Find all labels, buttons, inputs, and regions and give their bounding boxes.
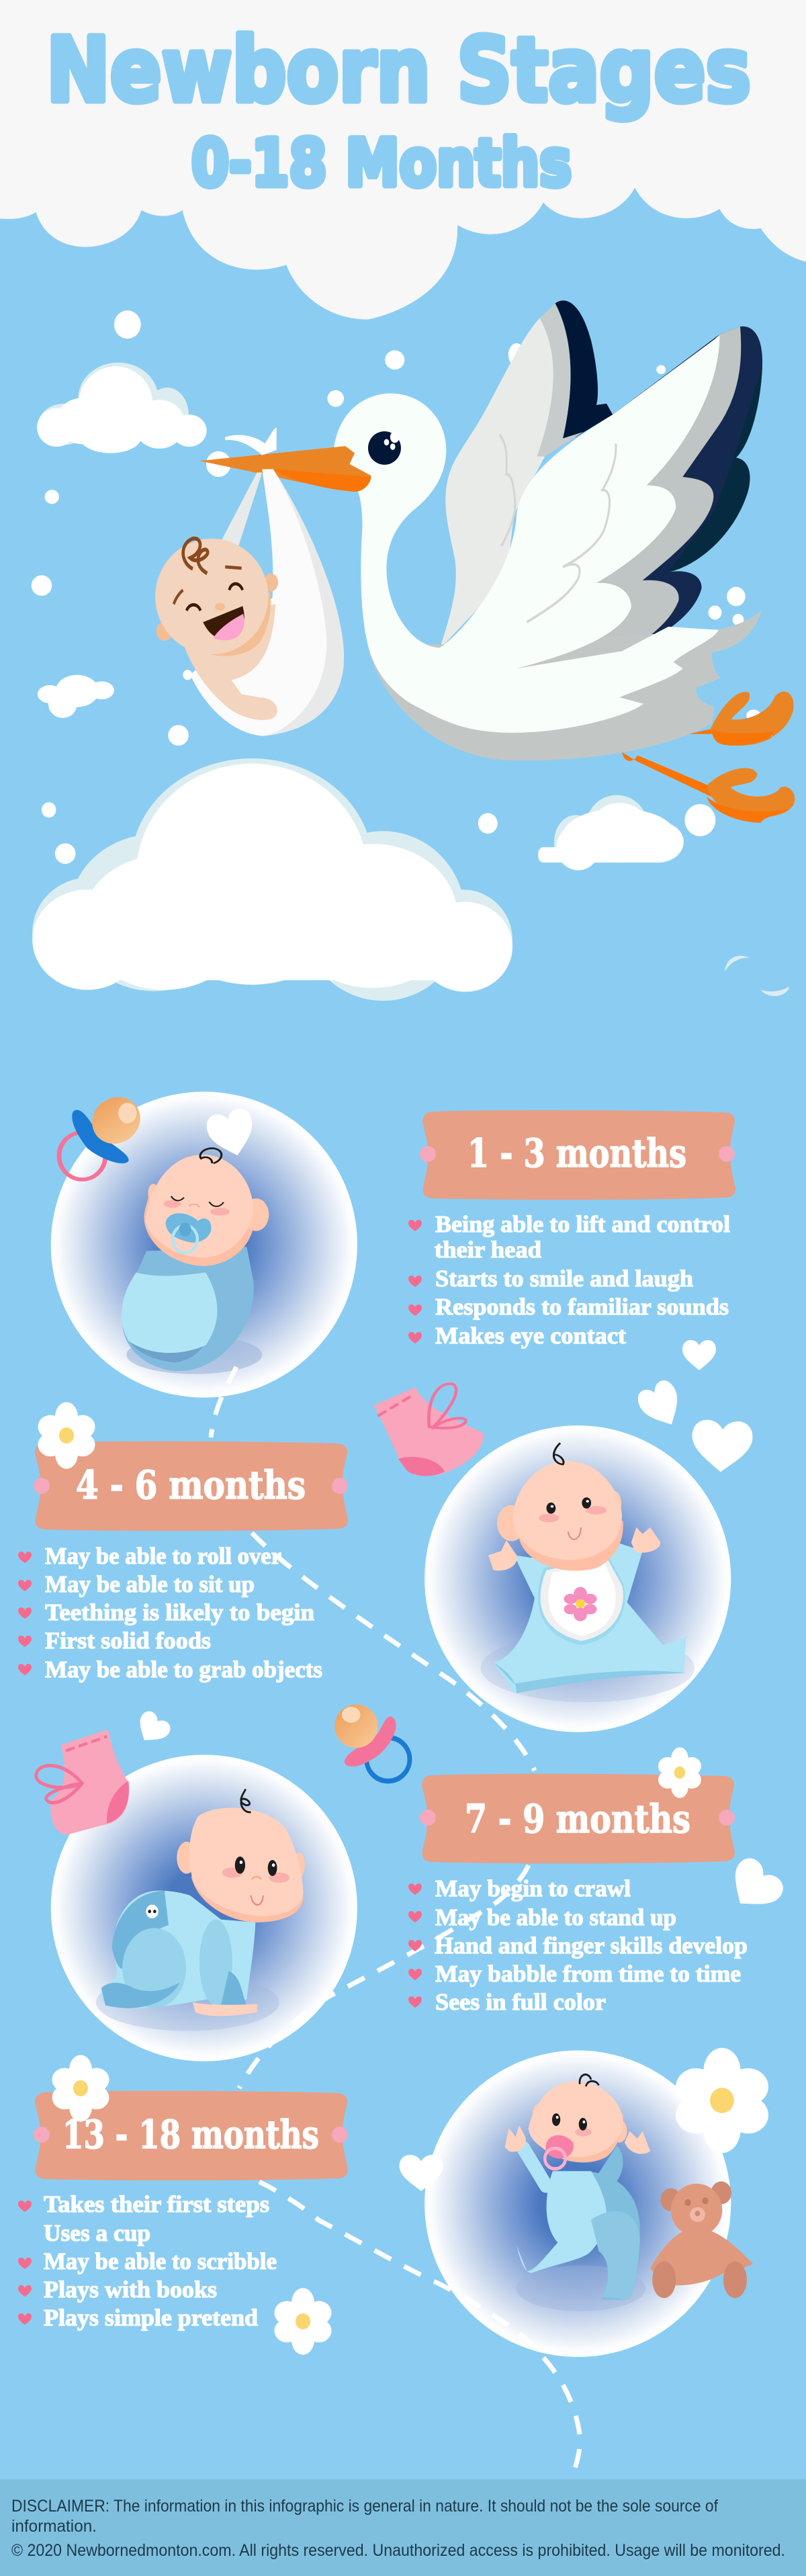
baby: sitting with bib <box>481 1443 695 1702</box>
ribbon <box>420 1110 735 1200</box>
far wing <box>439 300 613 649</box>
ribbon <box>420 1774 735 1863</box>
milestones list: Takes their first steps <box>44 2191 269 2217</box>
pacifier: pink and blue <box>334 1704 410 1781</box>
stage: 13 - 18 months <box>18 2091 348 2331</box>
baby: walking with pacifier <box>505 2074 650 2311</box>
milestones list: Plays with books <box>44 2276 217 2303</box>
wing feather lines <box>527 443 616 622</box>
milestones list: May be able to stand up <box>435 1904 676 1930</box>
cloud: upper left <box>37 363 207 453</box>
bubble: 4-6 months <box>424 1425 731 1732</box>
milestones list: Sees in full color <box>435 1989 606 2015</box>
milestones list: May be able to grab objects <box>45 1656 322 1683</box>
stage: 7 - 9 months <box>408 1774 748 2015</box>
disclaimer band <box>0 2479 806 2576</box>
title <box>46 19 751 201</box>
bundle cloth <box>190 468 344 736</box>
milestones list: May begin to crawl <box>435 1875 631 1902</box>
milestones list: Being able to lift and control <box>435 1211 730 1237</box>
milestones list: Uses a cup <box>44 2220 150 2246</box>
body underside <box>367 611 762 760</box>
stork legs and feet <box>622 693 793 823</box>
milestones list: May babble from time to time <box>435 1961 741 1987</box>
body and neck <box>334 336 719 733</box>
swooshes <box>725 956 790 996</box>
hero illustration <box>32 300 793 1001</box>
disclaimer band: DISCLAIMER: The information in this infographic is general in nature. It should not be the sole source of <box>11 2497 718 2516</box>
ribbon <box>34 2091 348 2180</box>
dashed journey path <box>211 1367 580 2477</box>
baby: crawling <box>96 1789 305 2031</box>
milestones list: Starts to smile and laugh <box>435 1265 693 1292</box>
milestones list: May be able to roll over <box>45 1543 281 1569</box>
subtitle: 0-18 Months <box>191 126 572 201</box>
ribbon <box>34 1441 348 1531</box>
heading: 4 - 6 months <box>76 1462 306 1508</box>
baby in bundle <box>155 427 344 736</box>
floating dots <box>32 310 761 864</box>
bubbles row 1 and 2 <box>51 1092 731 1732</box>
baby: swaddled and sleeping <box>122 1148 269 1374</box>
sock: pink with bow <box>373 1384 484 1476</box>
hearts <box>131 1106 788 2191</box>
milestones list: their head <box>435 1237 542 1263</box>
milestones list: May be able to sit up <box>45 1571 255 1597</box>
milestones list: Responds to familiar sounds <box>435 1294 729 1320</box>
stage: 1 - 3 months <box>408 1110 735 1349</box>
stage: 4 - 6 months <box>18 1441 348 1683</box>
disclaimer band: information. <box>11 2517 97 2536</box>
milestones list <box>18 1543 322 1683</box>
bubbles row 3 and 4 <box>51 1755 731 2357</box>
beak <box>199 446 371 492</box>
flowers <box>38 1402 768 2355</box>
cloud: lower right <box>538 795 684 871</box>
heading: 7 - 9 months <box>465 1796 690 1842</box>
baby head <box>155 539 278 656</box>
milestones list <box>408 1875 748 2015</box>
milestones list: Makes eye contact <box>435 1323 626 1349</box>
eye <box>368 431 401 465</box>
milestones list <box>408 1211 730 1349</box>
milestones list: Hand and finger skills develop <box>435 1933 748 1959</box>
cloud: large <box>32 758 512 1001</box>
stork <box>199 300 793 823</box>
bundle strap and knot <box>221 427 277 547</box>
cloud: small left <box>38 675 114 718</box>
milestones list: May be able to scribble <box>44 2248 277 2274</box>
top cloud banner <box>0 0 806 320</box>
bubble: 13-18 months <box>424 2051 731 2357</box>
heading: 13 - 18 months <box>62 2112 319 2158</box>
teddy bear <box>650 2182 753 2298</box>
milestones list: First solid foods <box>45 1628 211 1654</box>
milestones list <box>18 2191 277 2331</box>
pacifier: blue and orange <box>59 1093 146 1180</box>
bubble: 1-3 months <box>51 1092 357 1398</box>
heading: 1 - 3 months <box>467 1130 686 1176</box>
baby arm <box>184 604 277 720</box>
milestones list: Teething is likely to begin <box>45 1599 314 1626</box>
sock: pink left <box>36 1730 129 1835</box>
milestones list: Plays simple pretend <box>44 2305 259 2331</box>
near wing dark feathers <box>514 326 762 673</box>
bubble: 7-9 months <box>51 1755 357 2061</box>
